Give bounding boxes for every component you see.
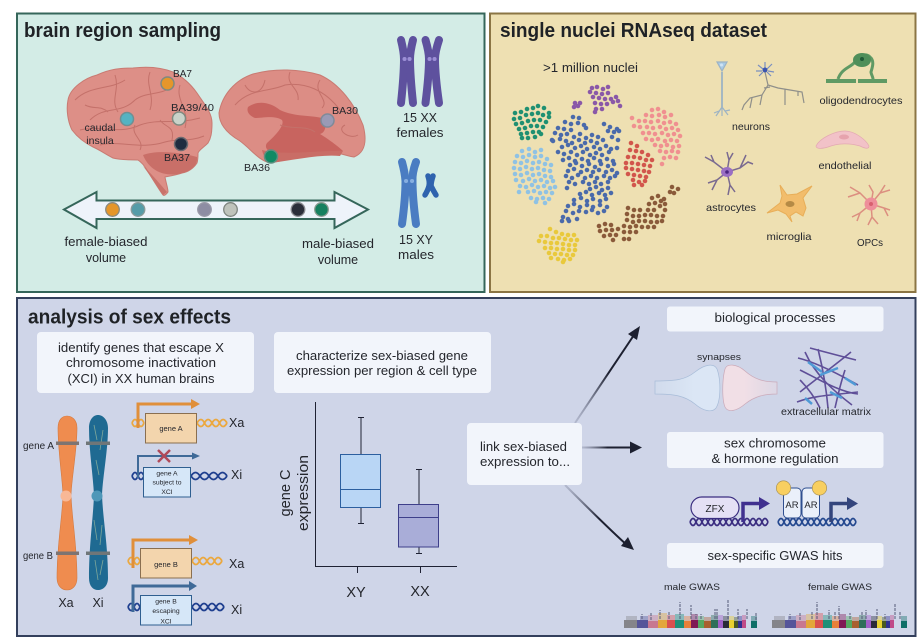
diagram: gene B escaping XCI: gene B	[155, 598, 177, 606]
callout: characterize sex-biased expression: expression per region & cell type	[287, 364, 477, 378]
callout: characterize sex-biased expression	[274, 332, 491, 393]
callout: sex chromosome & hormone regulation: & hormone regulation	[712, 452, 839, 466]
label: female-biased volume	[64, 235, 148, 265]
heading: brain region sampling: brain region sampling	[24, 20, 221, 42]
callout: biological processes	[667, 306, 884, 332]
marker: caudal insula	[85, 112, 134, 147]
label: male-biased volume	[302, 237, 374, 267]
diagram: gene A on Xa: Xa	[229, 416, 244, 430]
label: 15 XX females	[396, 110, 444, 140]
label: female GWAS: female GWAS	[808, 582, 872, 593]
diagram: AR binding: AR	[804, 500, 818, 511]
chart: gene C boxplot: gene C	[278, 470, 294, 516]
callout: link sex-biased expression: expression to...	[480, 455, 570, 469]
label: female-biased volume: volume	[86, 251, 126, 265]
callout: sex-specific GWAS hits	[667, 543, 884, 568]
icon: Xi chromosome	[86, 415, 110, 590]
marker: BA39/40	[171, 102, 214, 125]
diagram: gene A subject to XCI	[132, 450, 242, 497]
diagram: gene A subject to XCI: XCI	[161, 489, 173, 496]
icon: interneuron	[742, 62, 804, 110]
chart: nuclei cluster map	[514, 87, 680, 262]
panel: brain region sampling	[17, 14, 484, 292]
callout: identify genes	[37, 332, 254, 393]
label: neurons: neurons	[732, 121, 770, 133]
cluster: red	[626, 143, 652, 185]
chart: gene C boxplot	[278, 402, 457, 601]
diagram: ZFX binding	[690, 497, 770, 526]
icon: Xa chromosome	[56, 416, 79, 590]
chart: male GWAS manhattan plot	[624, 600, 757, 628]
callout: link sex-biased expression: link sex-biased	[480, 440, 567, 454]
arrow: to GWAS hits	[565, 485, 634, 550]
heading: analysis of sex effects: analysis of sex effects	[28, 306, 231, 328]
label: gene A: gene A	[23, 441, 54, 452]
diagram: gene B on Xa	[128, 535, 244, 578]
label: extracellular matrix: extracellular matrix	[781, 407, 871, 418]
marker: caudal insula: insula	[86, 135, 114, 147]
chart: gene C boxplot: expression	[296, 455, 312, 531]
label: astrocytes: astrocytes	[706, 202, 756, 214]
cluster: yellow	[539, 229, 577, 262]
chart: gene C boxplot: XY	[346, 585, 366, 601]
callout: sex chromosome & hormone regulation: sex chromosome	[724, 436, 826, 450]
label: OPCs: OPCs	[857, 237, 883, 249]
diagram: gene B escaping XCI: XCI	[160, 618, 172, 626]
label: male-biased volume: male-biased	[302, 237, 374, 251]
callout: identify genes: (XCI) in XX human brains	[68, 371, 215, 386]
diagram: gene A subject to XCI: subject to	[152, 480, 182, 486]
icon: medial brain	[219, 70, 365, 163]
arrow: volume bias scale	[64, 192, 368, 228]
label: gene B: gene B	[23, 551, 53, 562]
icon: XX chromosomes	[401, 40, 439, 103]
marker: BA36	[244, 150, 278, 174]
panel: analysis of sex effects	[17, 298, 916, 636]
label: endothelial: endothelial	[818, 160, 872, 172]
diagram: AR binding	[776, 481, 858, 526]
callout: identify genes: chromosome inactivation	[66, 355, 216, 370]
marker: BA39/40: BA39/40	[171, 102, 214, 114]
marker: caudal insula: caudal	[85, 122, 115, 134]
marker: BA30	[321, 105, 358, 127]
icon: XY chromosomes	[402, 162, 436, 224]
callout: link sex-biased expression	[467, 423, 582, 485]
cluster: pink	[632, 109, 680, 164]
marker: BA7: BA7	[173, 68, 192, 80]
diagram: AR binding: AR	[785, 500, 799, 511]
arrow: to biological processes	[575, 326, 640, 423]
diagram: gene B escaping XCI	[128, 581, 242, 626]
cluster: light blue	[514, 149, 555, 203]
icon: endothelial cell	[816, 131, 869, 148]
label: male GWAS: male GWAS	[664, 582, 720, 593]
cluster: teal	[514, 106, 549, 138]
icon: extracellular matrix	[797, 348, 858, 408]
label: Xa chromosome name: Xa	[58, 596, 74, 610]
marker: BA7	[161, 68, 192, 90]
diagram: gene A subject to XCI: gene A	[156, 470, 178, 478]
marker: BA36: BA36	[244, 162, 270, 174]
chart: female GWAS manhattan plot	[772, 602, 907, 628]
callout: sex-specific GWAS hits: sex-specific GWAS hits	[708, 549, 842, 563]
label: synapses: synapses	[697, 352, 741, 363]
icon: astrocyte	[705, 152, 753, 195]
marker: BA37	[164, 138, 190, 164]
callout: biological processes: biological processes	[714, 311, 836, 325]
arrow: to hormone regulation	[582, 442, 642, 454]
icon: oligodendrocyte	[826, 53, 887, 83]
chart: gene C boxplot: XX	[410, 584, 430, 600]
diagram: gene A on Xa	[132, 399, 244, 443]
callout: characterize sex-biased expression: characterize sex-biased gene	[296, 349, 468, 363]
icon: synapse	[655, 365, 777, 411]
icon: pyramidal neuron	[714, 62, 730, 116]
label: 15 XY males: males	[398, 247, 435, 262]
diagram: ZFX binding: ZFX	[706, 504, 725, 515]
diagram: gene B on Xa: Xa	[229, 557, 244, 571]
label: female-biased volume: female-biased	[64, 235, 148, 249]
heading: single nuclei RNAseq dataset: single nuclei RNAseq dataset	[500, 20, 767, 42]
label: 15 XX females: females	[396, 125, 444, 140]
marker: BA37: BA37	[164, 152, 190, 164]
diagram: gene B escaping XCI: escaping	[152, 608, 180, 615]
diagram: gene B escaping XCI: Xi	[231, 603, 242, 617]
marker: BA30: BA30	[332, 105, 358, 117]
label: 15 XY males	[398, 232, 435, 262]
callout: identify genes: identify genes that escape X	[58, 340, 224, 355]
cluster: brown	[599, 187, 678, 240]
icon: lateral brain	[67, 67, 212, 195]
callout: sex chromosome & hormone regulation	[667, 432, 884, 468]
diagram: gene B on Xa: gene B	[154, 560, 178, 569]
cluster: purple	[574, 87, 620, 112]
icon: microglia	[767, 185, 812, 222]
panel: single nuclei RNAseq dataset	[490, 14, 916, 292]
label: 15 XY males: 15 XY	[399, 232, 433, 247]
label: >1 million nuclei: >1 million nuclei	[543, 61, 638, 75]
diagram: gene A on Xa: gene A	[159, 424, 183, 433]
cluster: blue	[552, 117, 619, 221]
diagram: gene A subject to XCI: Xi	[231, 468, 242, 482]
icon: OPC	[848, 185, 890, 225]
label: microglia: microglia	[766, 231, 812, 243]
label: Xi chromosome name: Xi	[92, 596, 104, 610]
label: oligodendrocytes: oligodendrocytes	[820, 95, 902, 107]
label: male-biased volume: volume	[318, 253, 358, 267]
label: 15 XX females: 15 XX	[403, 110, 437, 125]
